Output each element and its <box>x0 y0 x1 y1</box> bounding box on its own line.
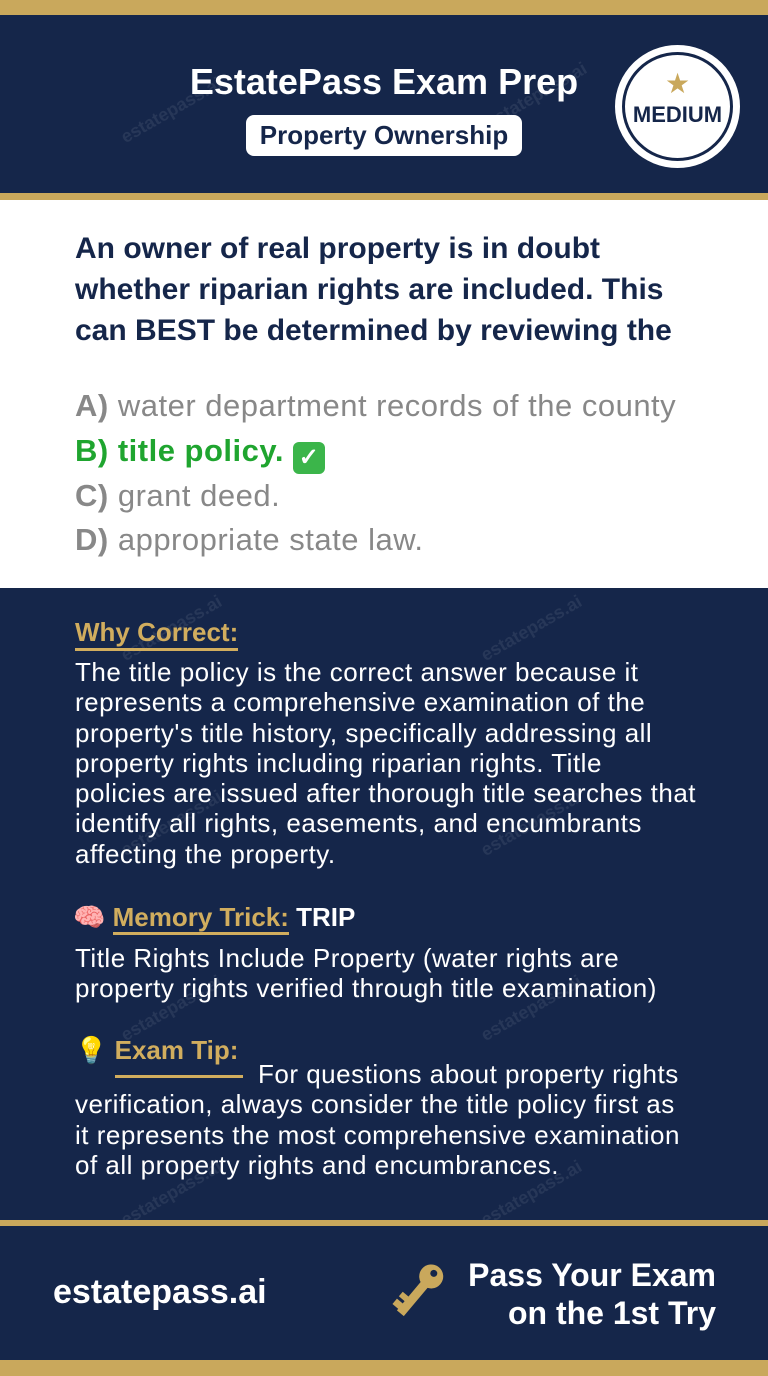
question panel <box>0 200 768 588</box>
options: ✓ <box>299 444 319 471</box>
memory trick text: property rights verified through title examination) <box>75 973 657 1003</box>
difficulty badge <box>615 45 740 168</box>
difficulty badge: MEDIUM <box>633 102 722 127</box>
slogan <box>468 1257 716 1331</box>
footer gold line <box>0 1220 768 1226</box>
options: C) grant deed. <box>75 478 280 513</box>
why correct text: policies are issued after thorough title searches that <box>75 778 696 808</box>
footer url: estatepass.ai <box>53 1273 267 1311</box>
slogan: Pass Your Exam <box>468 1257 716 1293</box>
why correct heading: Why Correct: <box>75 617 238 647</box>
options <box>75 388 676 557</box>
footer <box>0 1226 768 1360</box>
header panel <box>0 15 768 193</box>
question text <box>74 232 672 347</box>
why correct text: property's title history, specifically addressing all <box>75 718 652 748</box>
bottom gold bar <box>0 1360 768 1376</box>
icon: key <box>392 1264 444 1316</box>
title: EstatePass Exam Prep <box>190 61 578 102</box>
header panel: estatepass.ai <box>117 73 225 147</box>
why correct text: identify all rights, easements, and encumbrants <box>75 808 642 838</box>
explanation panel: estatepass.ai <box>117 786 225 860</box>
category pill <box>246 115 522 156</box>
slogan: on the 1st Try <box>508 1295 716 1331</box>
explanation panel: estatepass.ai <box>117 971 225 1045</box>
options: B) title policy. <box>75 433 284 468</box>
exam tip heading: 💡 Exam Tip: <box>75 1035 238 1065</box>
explanation panel: estatepass.ai <box>477 1156 585 1230</box>
category pill: Property Ownership <box>260 120 508 150</box>
why correct text: represents a comprehensive examination of the <box>75 687 645 717</box>
explanation panel: estatepass.ai <box>477 971 585 1045</box>
explanation panel: estatepass.ai <box>117 1156 225 1230</box>
question text: An owner of real property is in doubt <box>75 232 600 265</box>
question text: whether riparian rights are included. This <box>75 273 663 306</box>
memory trick heading: 🧠 Memory Trick: TRIP <box>73 902 355 932</box>
memory trick text <box>75 943 657 1003</box>
top gold bar <box>0 0 768 15</box>
exam tip text: it represents the most comprehensive examination <box>75 1120 680 1150</box>
why correct text: property rights including riparian rights. Title <box>75 748 602 778</box>
explanation panel: estatepass.ai <box>117 591 225 665</box>
header panel: estatepass.ai <box>482 58 590 132</box>
options: D) appropriate state law. <box>75 522 424 557</box>
question text: can BEST be determined by reviewing the <box>75 314 672 347</box>
why correct text <box>75 657 696 869</box>
explanation panel <box>0 588 768 1220</box>
exam tip text: For questions about property rights <box>258 1059 679 1089</box>
exam tip text: of all property rights and encumbrances. <box>75 1150 559 1180</box>
exam tip text <box>75 1059 680 1180</box>
exam tip text: verification, always consider the title policy first as <box>75 1089 675 1119</box>
gold divider <box>0 193 768 200</box>
difficulty badge: ★ <box>665 68 690 99</box>
memory trick text: Title Rights Include Property (water rights are <box>75 943 619 973</box>
explanation panel: estatepass.ai <box>477 786 585 860</box>
why correct text: affecting the property. <box>75 839 336 869</box>
why correct text: The title policy is the correct answer because it <box>75 657 639 687</box>
explanation panel: estatepass.ai <box>477 591 585 665</box>
options: A) water department records of the county <box>75 388 676 423</box>
